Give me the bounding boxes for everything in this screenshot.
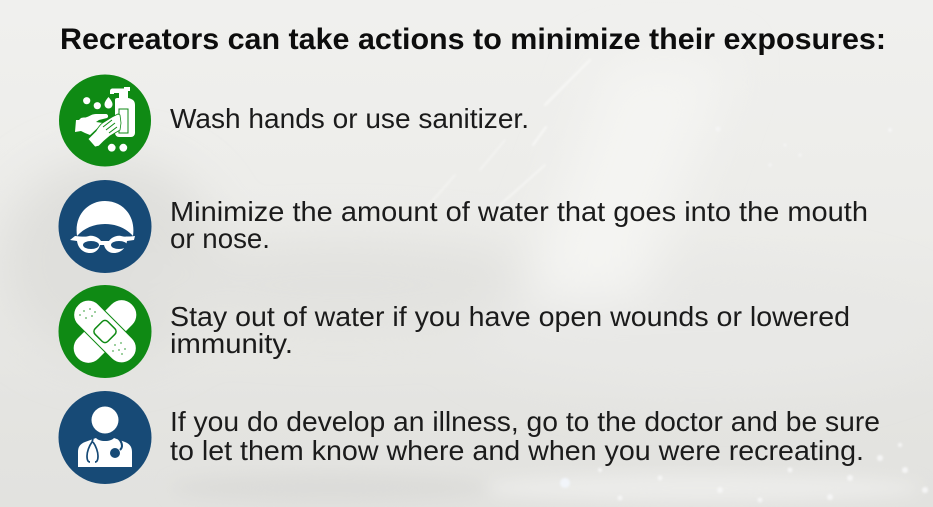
icon: doctor with stethoscope [58, 391, 152, 484]
text: stay out of water: Stay out of water if you have open wounds or lowered [170, 301, 850, 332]
text: wash hands: Wash hands or use sanitizer. [170, 103, 529, 134]
text: minimize water [170, 196, 868, 254]
text: minimize water: or nose. [170, 223, 270, 254]
text: see a doctor: If you do develop an illness, go to the doctor and be sure [170, 406, 880, 437]
icon: swim cap and goggles [58, 180, 152, 273]
text: see a doctor: to let them know where and when you were recreating. [170, 435, 864, 466]
text: stay out of water: immunity. [170, 328, 293, 359]
icon: crossed bandages [58, 285, 152, 378]
text: stay out of water [170, 301, 850, 359]
title: Recreators can take actions to minimize their exposures: [60, 23, 886, 56]
text: see a doctor [170, 406, 880, 466]
icon: washing hands with sanitizer [59, 74, 151, 166]
text: minimize water: Minimize the amount of water that goes into the mouth [170, 196, 868, 227]
